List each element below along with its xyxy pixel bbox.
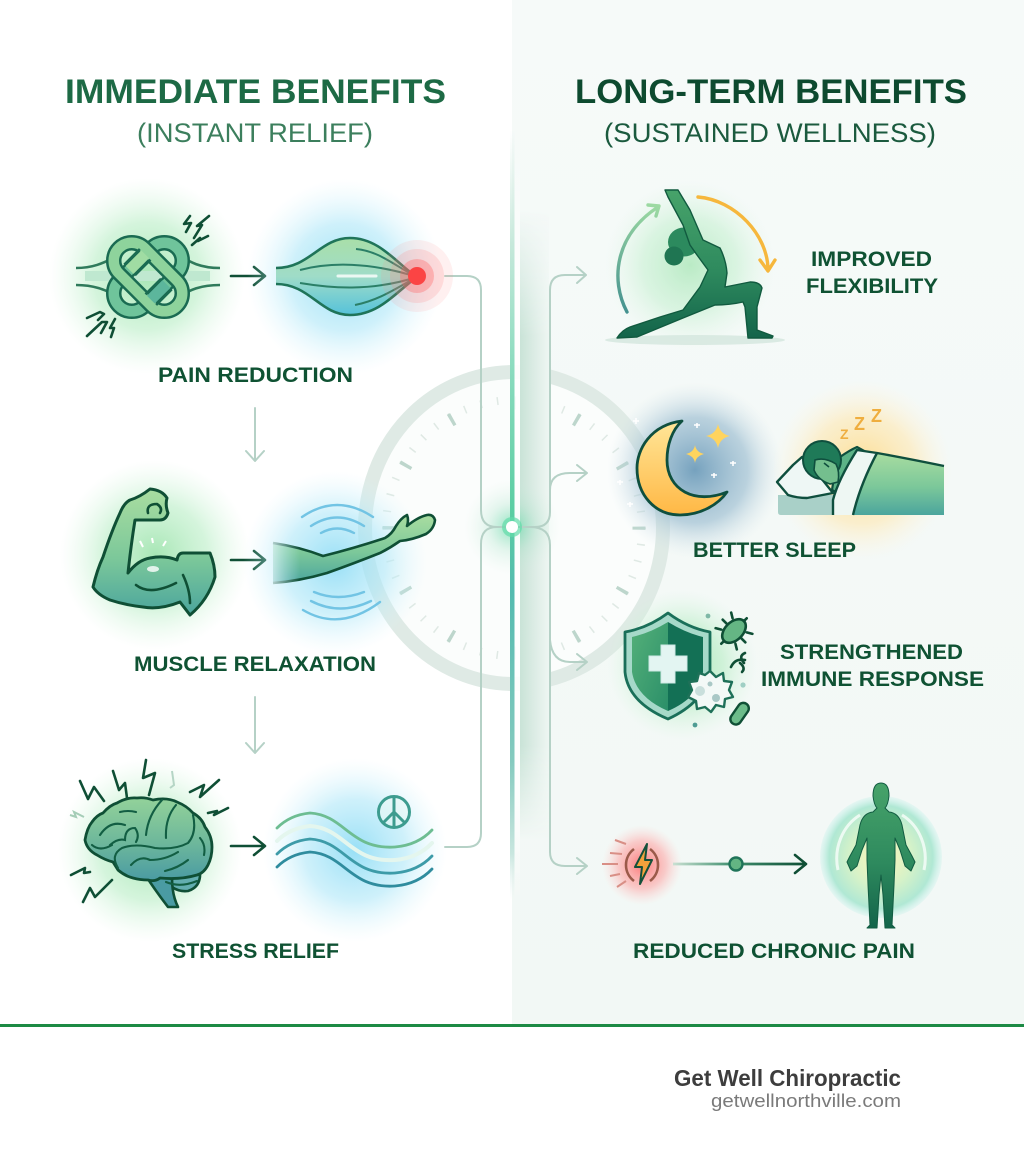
arrow: muscle relaxation to stress relief (246, 697, 264, 753)
icon: sleeping person: Z (871, 406, 882, 426)
icon: sleeping person: Z (840, 426, 849, 442)
label: strengthened immune response: STRENGTHENED (780, 641, 963, 664)
title: immediate benefits: (INSTANT RELIEF) (137, 118, 373, 148)
icon: sleeping person (772, 380, 952, 560)
icon: sleeping person: Z (854, 414, 865, 434)
icon: relaxed muscle with pain point (247, 179, 453, 375)
icon: stressed brain (58, 758, 242, 942)
icon: moon and stars (607, 382, 783, 558)
icon: calm waves with peace symbol (263, 758, 447, 942)
icon: tangled muscle knot (49, 178, 245, 374)
icon: yoga pose (605, 180, 785, 350)
label: strengthened immune response (761, 641, 984, 691)
central node (502, 517, 522, 537)
arrow: pain to healthy body (673, 855, 806, 873)
label: improved flexibility (806, 248, 938, 298)
icon: shield with cross and pathogens (607, 590, 758, 740)
central timeline band (475, 149, 549, 888)
label: better sleep: BETTER SLEEP (693, 539, 856, 562)
footer brand: getwellnorthville.com (711, 1090, 901, 1111)
panel: long-term background (512, 0, 1024, 1024)
title: immediate benefits: IMMEDIATE BENEFITS (65, 73, 446, 111)
arrow: brain to calm waves (231, 837, 265, 855)
footer brand: Get Well Chiropractic (674, 1065, 901, 1091)
icon: flexed arm (60, 460, 250, 650)
label: improved flexibility: FLEXIBILITY (806, 275, 938, 298)
title: long-term benefits (575, 73, 967, 148)
footer rule (0, 1024, 1024, 1027)
icon: chronic pain lightning (602, 825, 682, 905)
arrow: knot to muscle (231, 267, 265, 285)
connector: right branches to long-term benefits (514, 267, 587, 874)
connector: left bracket from immediate benefits (445, 276, 510, 847)
footer brand (674, 1065, 901, 1111)
icon: healthy body with aura (820, 783, 942, 928)
title: immediate benefits (65, 73, 446, 148)
clock dial background (365, 372, 663, 684)
arrow: flexed arm to relaxed arm (231, 551, 265, 569)
label: strengthened immune response: IMMUNE RESPONSE (761, 668, 984, 691)
title: long-term benefits: LONG-TERM BENEFITS (575, 73, 967, 111)
arrow: pain reduction to muscle relaxation (246, 408, 264, 461)
title: long-term benefits: (SUSTAINED WELLNESS) (604, 118, 936, 148)
icon: relaxed arm with waves (246, 482, 436, 644)
label: improved flexibility: IMPROVED (811, 248, 932, 271)
label: muscle relaxation: MUSCLE RELAXATION (134, 653, 376, 676)
label: stress relief: STRESS RELIEF (172, 940, 339, 963)
label: pain reduction: PAIN REDUCTION (158, 364, 353, 387)
label: reduced chronic pain: REDUCED CHRONIC PAIN (633, 940, 915, 963)
